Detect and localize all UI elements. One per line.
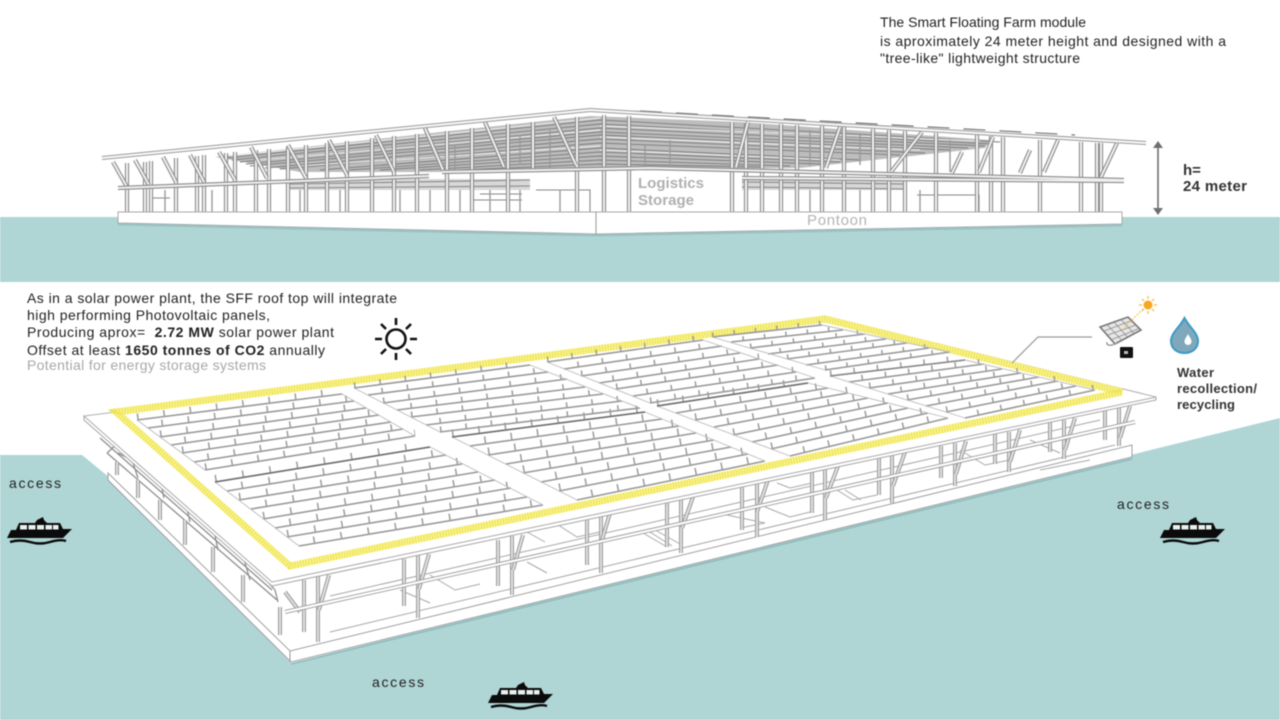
lower level band	[290, 178, 905, 190]
text: module description: "tree-like" lightweight structure	[880, 50, 1080, 66]
icon: boat right	[1160, 517, 1225, 544]
label: water recollection	[1177, 365, 1257, 412]
back columns	[165, 130, 950, 212]
arrow: height dimension	[1153, 141, 1163, 215]
roof slab	[84, 316, 1156, 586]
water band: elevation	[0, 217, 1280, 282]
text: solar description: Potential for energy storage systems	[27, 357, 266, 373]
solar panels: front mid-right block	[657, 380, 948, 456]
elevation drawing of the module	[102, 110, 1146, 236]
roof edge	[102, 110, 1146, 158]
trees	[117, 408, 1119, 642]
text: solar description: Offset at least 1650 tonnes of CO2 annually	[27, 342, 325, 358]
text: module description: The Smart Floating Farm module	[880, 14, 1086, 30]
label: water recollection: recollection/	[1177, 381, 1257, 396]
solar panels: back mid-left block	[354, 362, 640, 432]
label: height	[1183, 162, 1247, 195]
label: pontoon: Pontoon	[807, 212, 867, 229]
label: access left: access	[9, 475, 61, 491]
pontoon	[108, 445, 1132, 662]
label: access bottom: access	[372, 674, 424, 690]
icon: sun	[375, 318, 417, 360]
inner floor lines and openings	[330, 420, 1115, 632]
solar panels: back right block	[712, 323, 950, 370]
solar panels: front right block	[830, 357, 1095, 418]
solar panels: front left block	[215, 444, 543, 546]
leader line to solar panel icon	[1012, 337, 1092, 363]
plan view structure below the roof	[100, 406, 1135, 664]
text: solar description	[27, 290, 397, 373]
text: module description: is aproximately 24 meter height and designed with a	[880, 33, 1226, 49]
dense roof structure	[215, 111, 1075, 172]
icon: boat left	[7, 517, 72, 544]
solar panels: back mid-right block	[547, 337, 815, 403]
floor slab	[118, 168, 1124, 188]
yellow perimeter band	[116, 319, 1122, 566]
label: height: 24 meter	[1183, 178, 1247, 195]
label: access right: access	[1117, 496, 1169, 512]
text: solar description: high performing Photovoltaic panels,	[27, 307, 270, 323]
solar panels: front mid-left block	[452, 408, 765, 500]
label: logistics storage: Logistics	[638, 175, 704, 192]
label: water recollection: Water	[1177, 365, 1214, 380]
label: logistics storage: Storage	[638, 192, 694, 209]
text: solar description: As in a solar power plant, the SFF roof top will integrate	[27, 290, 397, 306]
logistics block	[632, 172, 730, 212]
left side bracing	[100, 438, 278, 602]
water: plan view	[0, 418, 1280, 720]
pontoon	[118, 212, 1122, 234]
columns	[127, 115, 1101, 212]
solar panels: back left block	[137, 391, 415, 470]
mid slab	[285, 422, 1135, 612]
icon: water drop	[1171, 318, 1198, 353]
text: solar description: Producing aprox= 2.72 MW solar power plant	[27, 324, 334, 340]
label: logistics storage	[638, 175, 704, 209]
tree branches	[113, 117, 1117, 187]
label: height: h=	[1183, 162, 1201, 179]
text: module description	[880, 14, 1226, 66]
label: water recollection: recycling	[1177, 397, 1235, 412]
icon: solar panel with sun	[1100, 296, 1157, 358]
icon: boat bottom	[488, 682, 553, 708]
